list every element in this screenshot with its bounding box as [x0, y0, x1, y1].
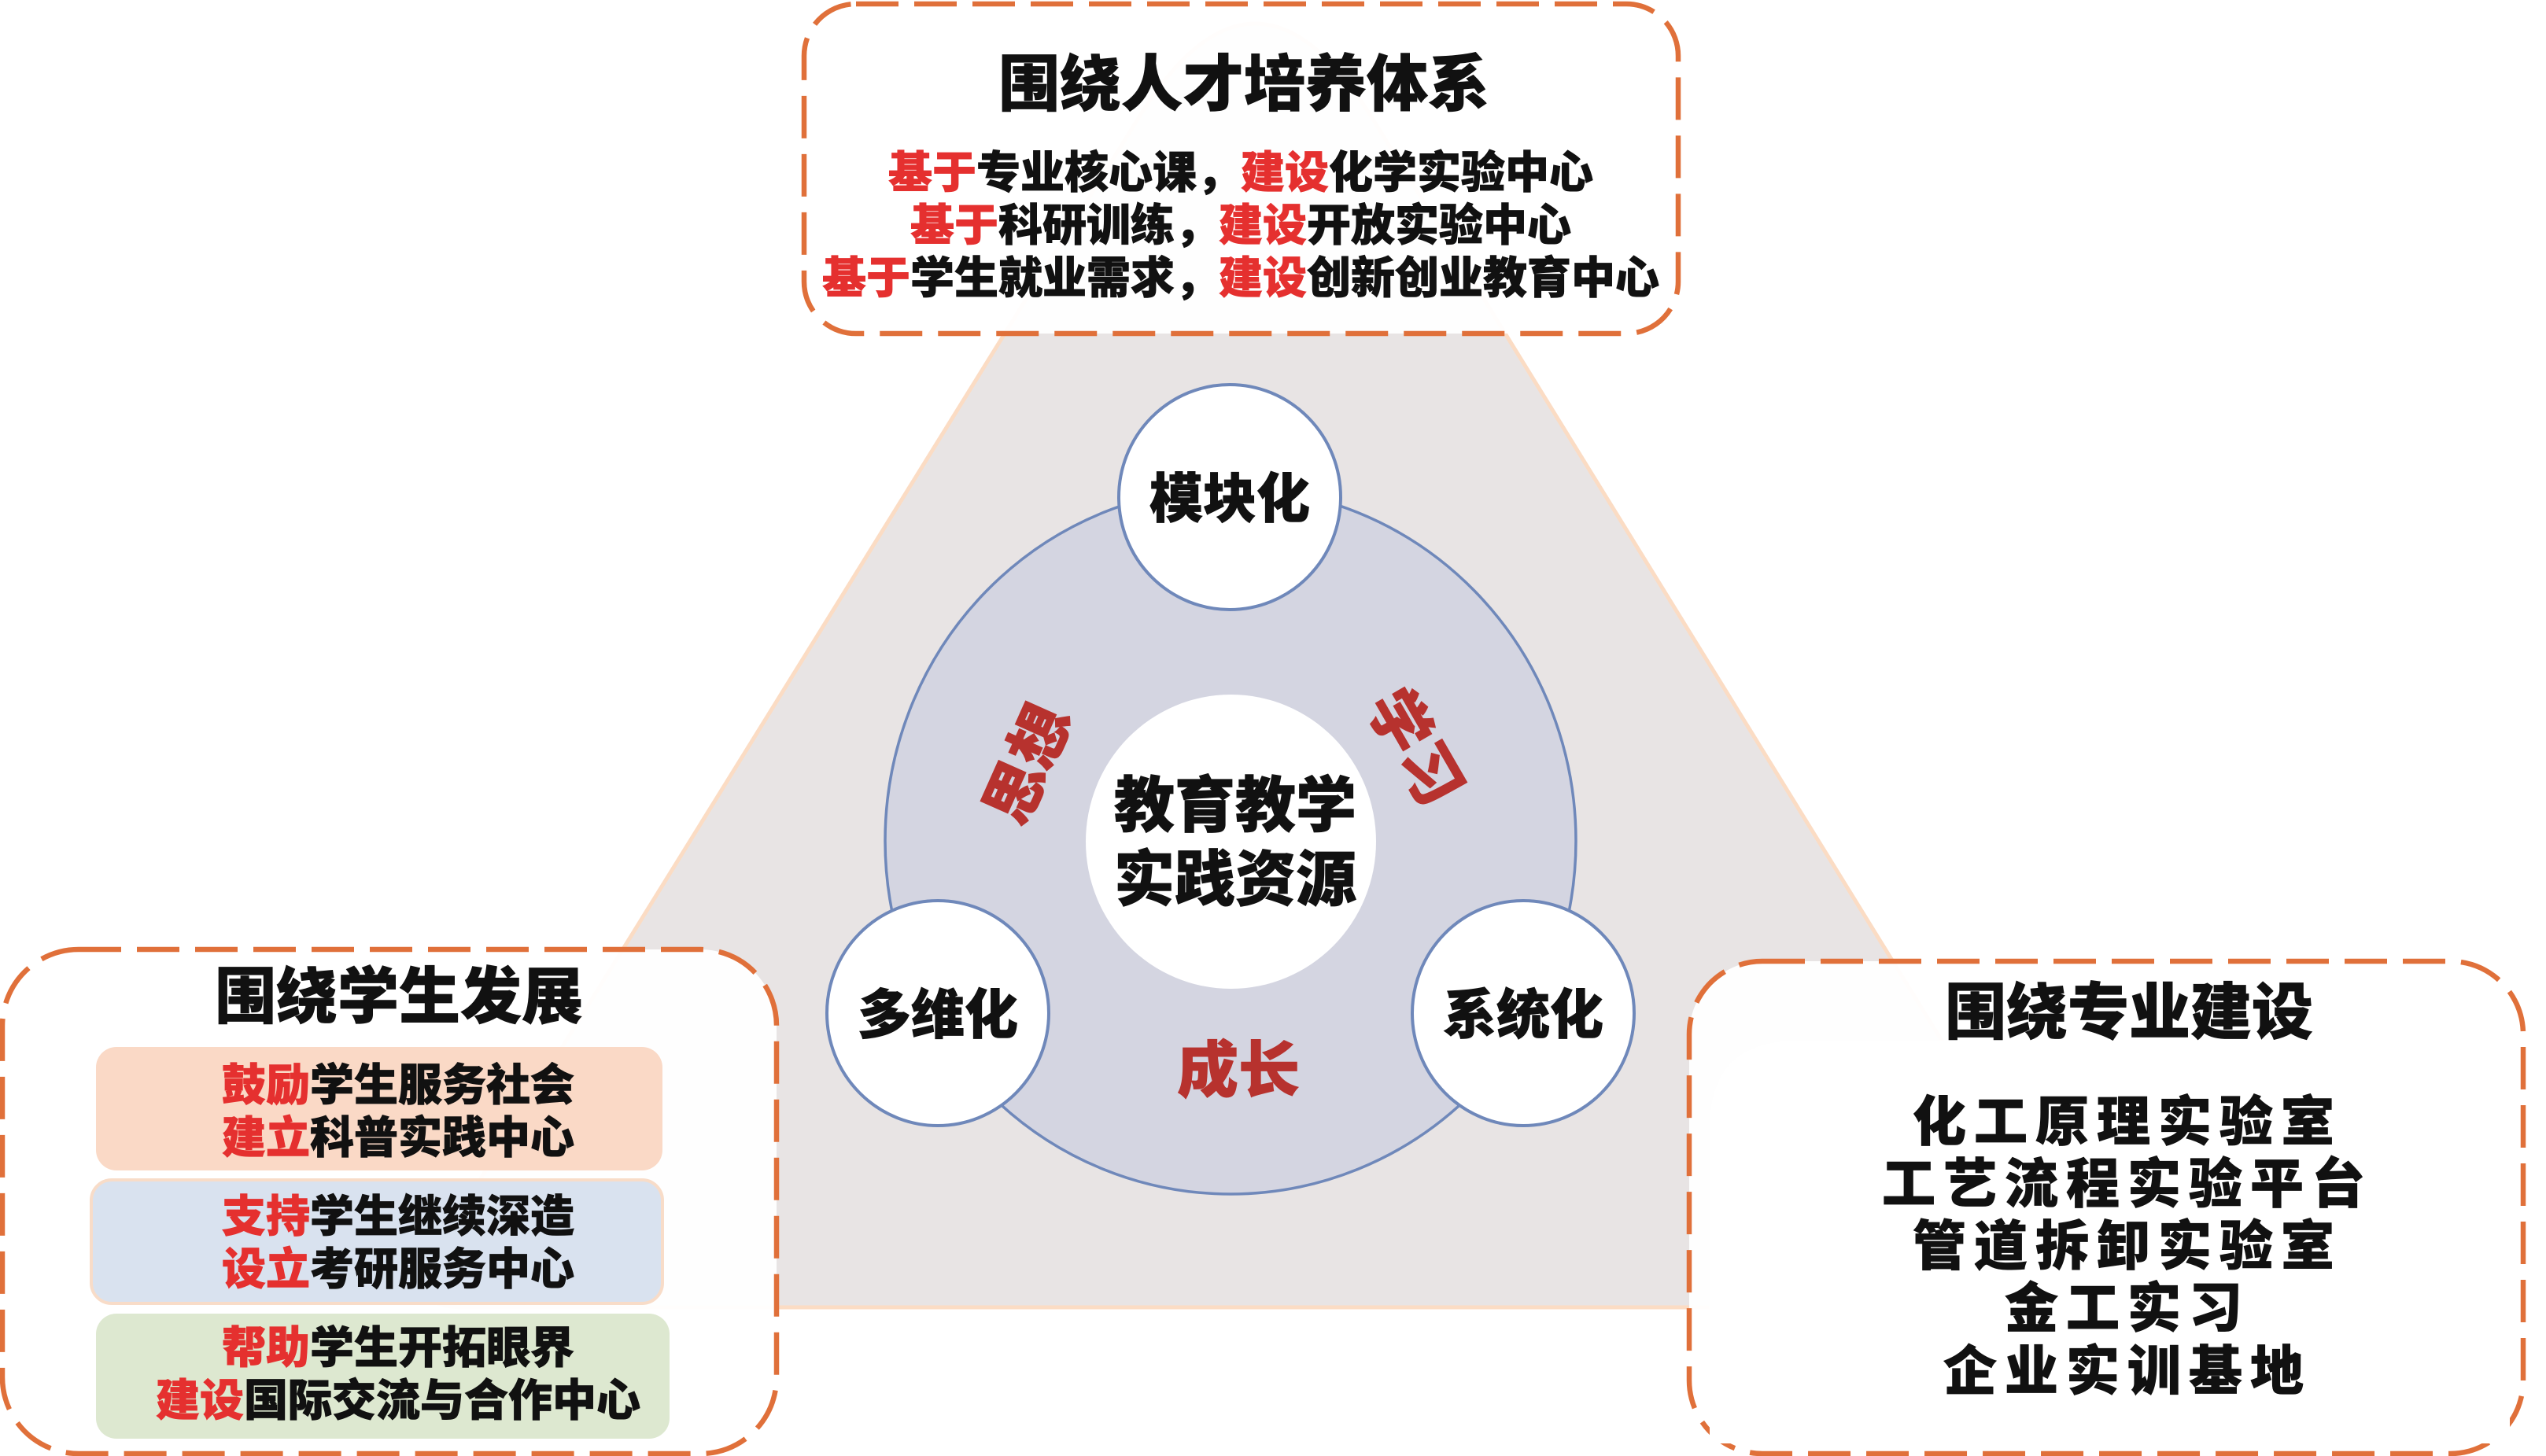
card: social service: 建立科普实践中心 — [222, 1113, 574, 1163]
card: social service: 鼓励学生服务社会 — [222, 1060, 574, 1110]
outer ring — [885, 488, 1576, 1194]
panel: discipline construction — [1689, 961, 2523, 1454]
centre circle: 实践资源 — [1114, 846, 1356, 914]
list: 化工原理实验室 — [1913, 1093, 2342, 1152]
list: 管道拆卸实验室 — [1913, 1217, 2342, 1277]
inner white area — [1710, 1041, 2510, 1443]
node: multi-dimensional: 多维化 — [858, 986, 1018, 1045]
card: horizons: 帮助学生开拓眼界 — [222, 1323, 574, 1373]
card: horizons: 建设国际交流与合作中心 — [156, 1376, 640, 1425]
node: systematic: 系统化 — [1443, 986, 1603, 1045]
list — [1882, 1093, 2373, 1402]
card: horizons — [96, 1314, 670, 1439]
card: further study: 支持学生继续深造 — [222, 1192, 574, 1241]
text block: 基于专业核心课，建设化学实验中心 — [888, 148, 1593, 197]
node: multi-dimensional — [827, 901, 1049, 1126]
card: further study: 设立考研服务中心 — [222, 1244, 574, 1294]
label: growth: 成长 — [1177, 1036, 1300, 1105]
centre circle: 教育教学 — [1114, 772, 1356, 840]
node: systematic — [1412, 901, 1634, 1126]
card: further study — [91, 1180, 662, 1303]
background triangle — [423, 24, 2087, 1307]
list: 工艺流程实验平台 — [1882, 1155, 2373, 1215]
heading: 围绕专业建设 — [1945, 978, 2313, 1047]
heading: 围绕学生发展 — [215, 962, 583, 1031]
list: 企业实训基地 — [1943, 1342, 2312, 1402]
label: study: 学习 — [1354, 677, 1475, 818]
ring diagram — [827, 385, 1634, 1194]
node: modular: 模块化 — [1149, 470, 1310, 529]
text block — [822, 148, 1659, 303]
node: modular — [1119, 385, 1341, 610]
panel: talent training system — [804, 4, 1678, 334]
card: social service — [96, 1047, 662, 1170]
heading: 围绕人才培养体系 — [998, 50, 1489, 119]
list: 金工实习 — [2005, 1279, 2250, 1339]
centre circle — [1086, 695, 1376, 989]
panel: student development — [2, 949, 777, 1454]
text block: 基于学生就业需求，建设创新创业教育中心 — [822, 253, 1659, 303]
text block: 基于科研训练，建设开放实验中心 — [910, 201, 1571, 250]
label: thought: 思想 — [972, 694, 1085, 835]
